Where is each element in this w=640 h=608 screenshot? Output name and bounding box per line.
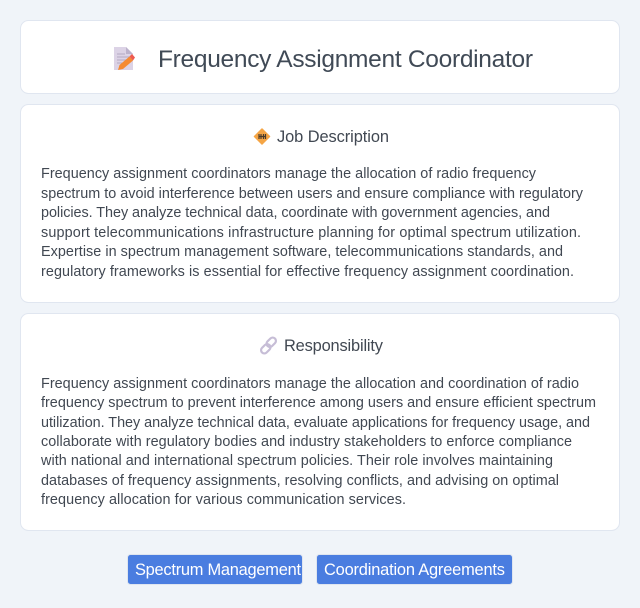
panel: responsibility xyxy=(20,314,620,530)
panel: title card xyxy=(20,20,620,94)
job description text: regulatory frameworks is essential for effective frequency assignment coordination. xyxy=(41,264,574,280)
job description text: spectrum to avoid interference between users and ensure compliance with regulatory xyxy=(41,186,584,202)
job description text: policies. They analyze technical data, coordinate with government agencies, and xyxy=(41,205,550,221)
job description text: Frequency assignment coordinators manage the allocation of radio frequency xyxy=(41,166,537,182)
responsibility text: with national and international spectrum policies. Their role involves maintaining xyxy=(40,453,553,469)
responsibility text: collaborate with regulatory bodies and industry stakeholders to enforce compliance xyxy=(41,434,572,450)
responsibility text: Frequency assignment coordinators manage the allocation and coordination of radio xyxy=(41,376,579,392)
heading: job description: Job Description xyxy=(277,128,389,146)
icon: link xyxy=(260,336,277,355)
job description text: support telecommunications infrastructure planning for optimal spectrum utilization. xyxy=(41,225,581,241)
heading: responsibility: Responsibility xyxy=(284,337,384,355)
icon: document with pencil xyxy=(114,47,135,70)
title: Frequency Assignment Coordinator xyxy=(158,46,533,73)
tag: spectrum management xyxy=(128,554,302,584)
tag: coordination agreements: Coordination Agreements xyxy=(324,561,505,579)
job description text xyxy=(41,166,584,280)
panel: job description xyxy=(20,104,620,302)
responsibility text: frequency spectrum to prevent interference among users and ensure efficient spectrum xyxy=(41,395,596,411)
tag: spectrum management: Spectrum Management xyxy=(135,561,301,579)
icon: diamond sign xyxy=(254,129,270,144)
job description text: Expertise in spectrum management software, telecommunications standards, and xyxy=(41,244,563,260)
responsibility text: frequency allocation for various communication services. xyxy=(41,492,406,508)
responsibility text: databases of frequency assignments, resolving conflicts, and advising on optimal xyxy=(41,473,559,489)
responsibility text xyxy=(40,376,596,508)
responsibility text: utilization. They analyze technical data, evaluate applications for frequency usage, and xyxy=(41,415,590,431)
tag: coordination agreements xyxy=(316,554,512,584)
